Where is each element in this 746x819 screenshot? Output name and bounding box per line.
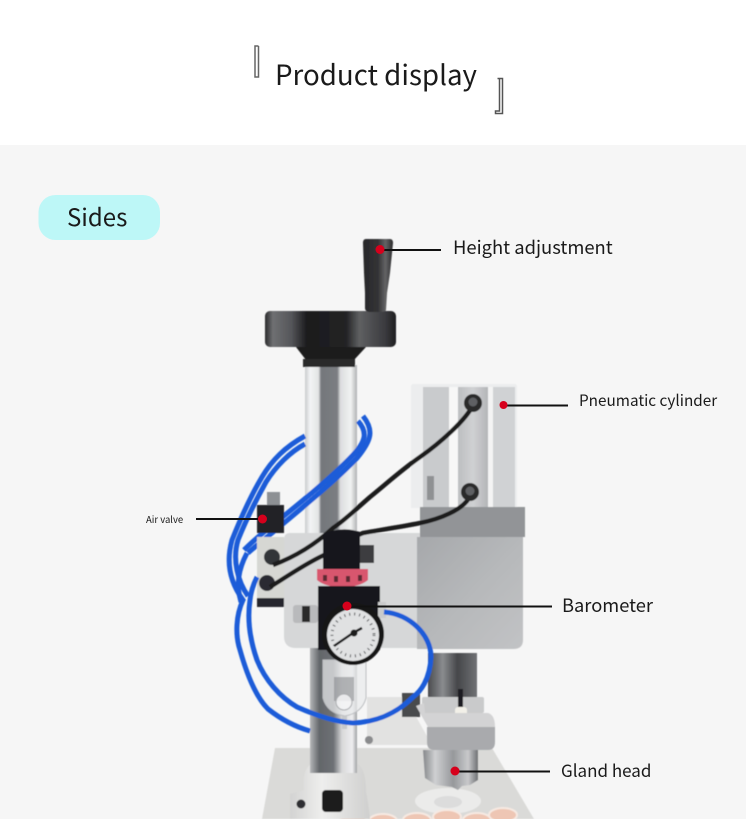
callout: Pneumatic cylinder — [500, 389, 717, 411]
badge: Sides — [38, 195, 160, 240]
hose fittings — [461, 394, 482, 501]
sealing disk — [415, 788, 481, 814]
callout: Height adjustment: Height adjustment — [453, 234, 613, 260]
title: Product display — [255, 46, 502, 114]
badge: Sides: Sides — [67, 198, 127, 233]
column upper — [305, 365, 357, 540]
title: Product display: Product display — [275, 53, 478, 93]
caps — [340, 808, 517, 819]
machine illustration — [229, 239, 534, 819]
column lower — [310, 645, 357, 773]
chuck — [423, 750, 478, 790]
air valve — [257, 492, 284, 533]
handle — [363, 239, 393, 312]
callout: Barometer — [342, 592, 654, 618]
callout: Height adjustment — [376, 234, 613, 260]
gland spindle — [428, 653, 477, 699]
air regulator — [293, 529, 386, 729]
callout: Pneumatic cylinder: Pneumatic cylinder — [579, 389, 717, 411]
blue loop tube — [249, 577, 431, 723]
callout: Gland head: Gland head — [561, 757, 651, 782]
hand wheel — [265, 311, 396, 367]
main block — [417, 507, 525, 649]
gland head collar and block — [416, 689, 495, 750]
black air hoses — [270, 405, 473, 587]
blue tubes behind — [229, 416, 370, 731]
pneumatic cylinder — [411, 384, 517, 508]
callout: Air valve: Air valve — [146, 512, 183, 526]
callout: Air valve — [146, 512, 267, 526]
rear slide plate — [365, 693, 432, 745]
mounting plate — [257, 533, 420, 648]
pressure gauge — [322, 603, 384, 665]
callout: Gland head — [450, 757, 651, 782]
base plate — [262, 748, 534, 819]
column collar — [290, 764, 370, 819]
callout: Barometer: Barometer — [562, 592, 654, 618]
filter bowl — [323, 660, 366, 729]
